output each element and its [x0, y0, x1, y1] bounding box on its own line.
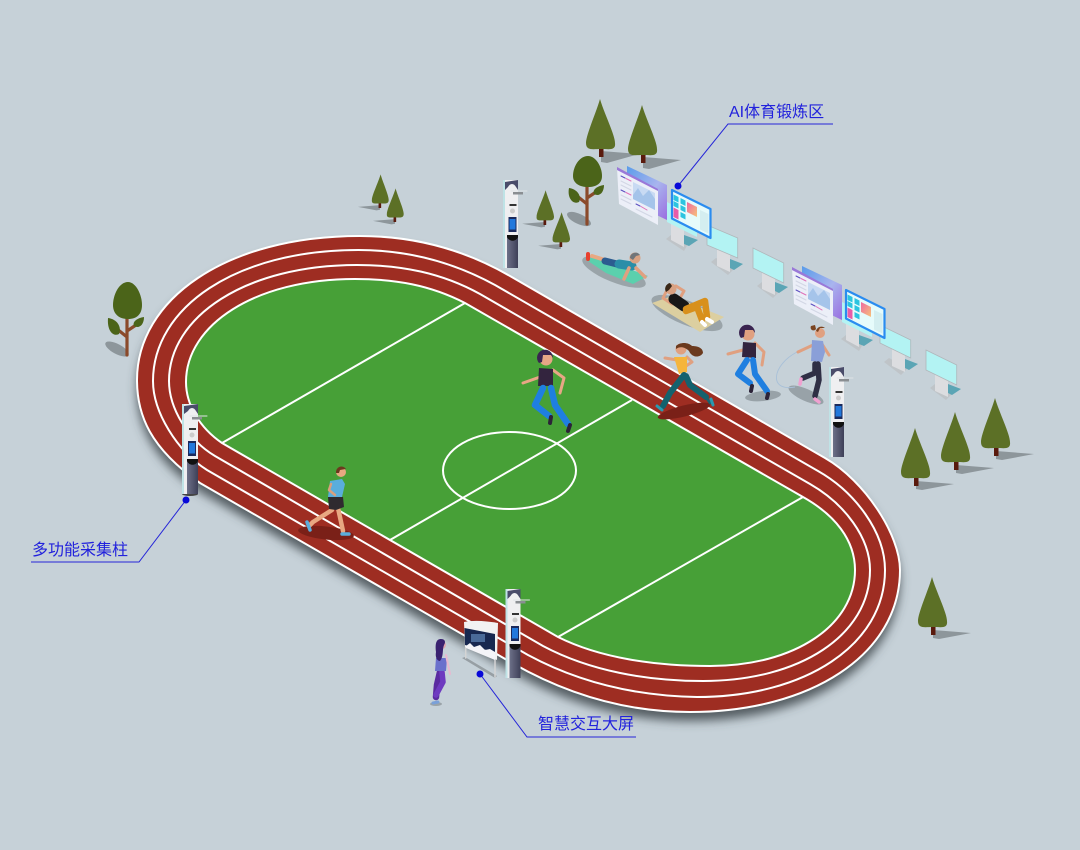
monitor 3 [753, 248, 788, 298]
tree: pine 6 [918, 577, 971, 639]
collection pillar: right [829, 367, 853, 457]
collection pillar: left [182, 404, 207, 496]
person: woman viewing screen [430, 639, 450, 706]
tree: pine 1 [586, 99, 639, 163]
leader line [678, 124, 833, 186]
back panel [627, 166, 667, 220]
tree: broadleaf left [103, 282, 144, 360]
tree: pine 3 [901, 428, 954, 490]
marker dot [476, 670, 484, 678]
chart [633, 182, 655, 210]
label: 多功能采集柱 [32, 541, 128, 559]
marker dot [182, 496, 190, 504]
callout: AI sports area [674, 103, 833, 190]
back panel [802, 266, 842, 320]
display [464, 628, 495, 652]
callout: smart screen [476, 670, 636, 737]
report sheet [792, 268, 833, 325]
tree: small pine 1 [358, 174, 389, 210]
leader line [480, 674, 636, 737]
data panels group 2 [792, 266, 842, 325]
label: 智慧交互大屏 [538, 715, 634, 733]
ground shadow [462, 657, 497, 678]
track surface [137, 236, 900, 712]
dashboard screen 2 [846, 290, 884, 338]
person: sit-ups on mat [647, 283, 727, 338]
interactive large screen [462, 621, 498, 678]
person: ponytail runner [656, 343, 713, 423]
chart [808, 282, 830, 310]
lane line inner [169, 265, 870, 681]
monitor 1 [666, 202, 698, 251]
lane line outer [153, 250, 885, 697]
monitor 5 [880, 325, 918, 375]
callout: multi-function pillar [31, 496, 190, 562]
track shadow [137, 245, 900, 721]
monitor 6 [926, 350, 961, 400]
collection pillar: bottom [506, 589, 530, 678]
tree: pine 5 [981, 398, 1034, 460]
person: male runner on track [297, 467, 355, 542]
person: jogger [728, 325, 781, 403]
report sheet [617, 168, 658, 225]
person: rope skipper [776, 325, 829, 408]
football field [186, 279, 855, 666]
running track [137, 236, 900, 712]
leader line [31, 500, 186, 562]
monitor 2 [707, 225, 743, 275]
tree: small pine 4 [538, 212, 570, 249]
person: plank on mat [579, 250, 649, 294]
tree: small pine 3 [522, 190, 554, 227]
dashboard screen 1 [672, 190, 710, 238]
marker dot [674, 182, 682, 190]
frame [464, 621, 498, 660]
field markings [222, 303, 803, 637]
tree: pine 4 [941, 412, 994, 474]
collection pillar: top [503, 180, 527, 268]
monitor 4 [841, 302, 873, 351]
data panels group 1 [617, 166, 667, 225]
tree: broadleaf top [565, 156, 604, 229]
label: AI体育锻炼区 [729, 103, 824, 121]
tree: small pine 2 [373, 188, 404, 224]
person: field runner [523, 350, 570, 431]
tree: pine 2 [628, 105, 681, 169]
legs [466, 645, 495, 677]
